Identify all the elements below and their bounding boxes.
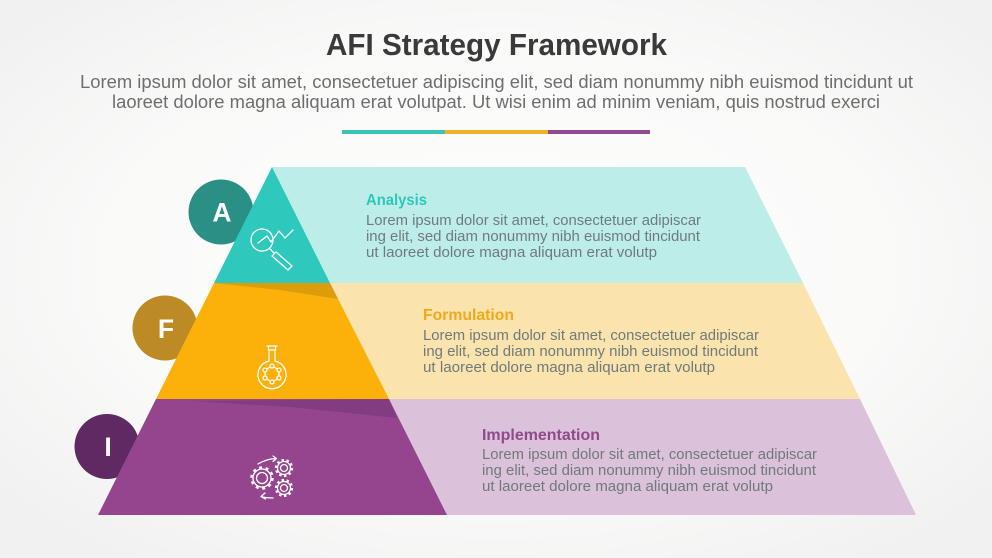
text block: formulation: Lorem ipsum dolor sit amet, consectetuer adipiscar xyxy=(423,328,759,344)
text block: formulation xyxy=(423,307,759,376)
text block: analysis: ut laoreet dolore magna aliquam erat volutp xyxy=(366,245,657,261)
text block: implementation: Lorem ipsum dolor sit amet, consectetuer adipiscar xyxy=(482,447,817,463)
icon: flask xyxy=(258,346,286,389)
circle badge: A: A xyxy=(212,198,232,228)
title: AFI Strategy Framework xyxy=(326,27,668,62)
text block: implementation: ut laoreet dolore magna aliquam erat volutp xyxy=(482,479,773,495)
text block: implementation: Implementation xyxy=(482,427,600,444)
text block: formulation: ut laoreet dolore magna aliquam erat volutp xyxy=(423,360,715,376)
pyramid tier: analysis xyxy=(214,167,330,283)
text block: analysis: Analysis xyxy=(366,192,427,209)
pyramid tier: implementation xyxy=(98,399,447,515)
text block: analysis: Lorem ipsum dolor sit amet, consectetuer adipiscar xyxy=(366,213,701,229)
text block: analysis: ing elit, sed diam nonummy nibh euismod tincidunt xyxy=(366,229,700,245)
circle badge: F: F xyxy=(158,314,174,344)
subtitle text block: laoreet dolore magna aliquam erat volutpat. Ut wisi enim ad minim veniam, quis nostrud exerci xyxy=(112,92,880,112)
text block: implementation xyxy=(482,427,817,495)
pyramid tier: formulation xyxy=(156,283,389,399)
text block: formulation: ing elit, sed diam nonummy nibh euismod tincidunt xyxy=(423,344,758,360)
circle badge: I xyxy=(74,414,140,479)
text block: implementation: ing elit, sed diam nonummy nibh euismod tincidunt xyxy=(482,463,816,479)
circle badge: I: I xyxy=(104,432,112,462)
panel: formulation band xyxy=(330,283,860,399)
subtitle text block xyxy=(80,72,913,112)
icon: magnifier with chart xyxy=(251,229,293,270)
icon: gears xyxy=(252,456,292,499)
subtitle text block: Lorem ipsum dolor sit amet, consectetuer adipiscing elit, sed diam nonummy nibh euismod tincidunt ut xyxy=(80,72,913,92)
panel: analysis band xyxy=(272,167,803,283)
circle badge: A xyxy=(188,180,254,244)
circle badge: F xyxy=(132,296,198,360)
text block: formulation: Formulation xyxy=(423,307,514,324)
panel: implementation band xyxy=(389,399,916,515)
tricolor divider xyxy=(342,130,650,134)
text block: analysis xyxy=(366,192,701,261)
